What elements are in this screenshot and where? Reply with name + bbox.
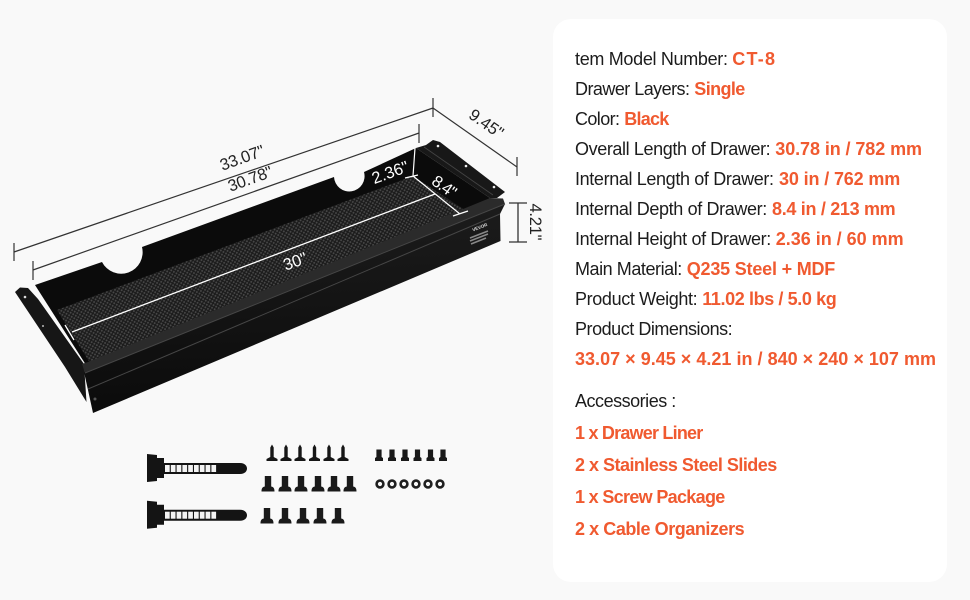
- spec: product dimensions: [575, 319, 936, 369]
- spec: drawer layers: [575, 79, 745, 99]
- spec: internal length: Internal Length of Drawer:: [575, 169, 774, 189]
- spec: product weight: Product Weight:: [575, 289, 698, 309]
- pointed screws row: [266, 444, 348, 461]
- spec: internal depth: [575, 199, 896, 219]
- dimension 30 in internal length: 30": [281, 249, 310, 275]
- drawer product illustration: [15, 140, 505, 413]
- dimension 33.07 in overall length: [14, 98, 433, 261]
- accessory: slides: 2 x Stainless Steel Slides: [575, 455, 777, 475]
- front rim: [82, 198, 505, 373]
- cable organizer bottom: [147, 501, 247, 529]
- dimension 2.36 in internal height: [369, 148, 418, 188]
- spec: color: Color:: [575, 109, 620, 129]
- spec: product weight: [575, 289, 837, 309]
- panel background: [553, 19, 947, 582]
- dimension 8.4 in internal depth: 8.4": [428, 172, 460, 202]
- mesh drawer liner: [57, 176, 468, 363]
- spec: product dimensions: 33.07 × 9.45 × 4.21 in / 840 × 240 × 107 mm: [575, 349, 936, 369]
- spec: internal depth: 8.4 in / 213 mm: [772, 199, 896, 219]
- panel: specifications: [553, 19, 947, 582]
- right mounting flange: [416, 140, 505, 198]
- spec: internal height: Internal Height of Drawer:: [575, 229, 771, 249]
- spec: main material: [575, 259, 835, 279]
- dimension 4.21 in height: [509, 203, 544, 242]
- front body: [84, 204, 505, 413]
- spec: overall length: Overall Length of Drawer:: [575, 139, 771, 159]
- spec: internal height: [575, 229, 904, 249]
- accessories heading: Accessories :: [575, 391, 676, 411]
- spec: internal depth: Internal Depth of Drawer:: [575, 199, 767, 219]
- spec: overall length: 30.78 in / 782 mm: [775, 139, 922, 159]
- nuts row: [377, 481, 443, 487]
- cable organizers: [147, 454, 247, 529]
- spec: color: Black: [624, 109, 670, 129]
- screw package: [260, 444, 447, 524]
- product label: [470, 222, 489, 244]
- spec: product weight: 11.02 lbs / 5.0 kg: [702, 289, 837, 309]
- dimension 30.78 in drawer length: [33, 124, 419, 280]
- left mounting flange: [15, 288, 86, 402]
- cable organizer top: [147, 454, 247, 482]
- spec: item model number: tem Model Number:: [575, 49, 728, 69]
- rim and groove lines: [85, 204, 505, 389]
- dimension 33.07 in overall length: 33.07": [218, 142, 267, 175]
- spec: main material: Main Material:: [575, 259, 682, 279]
- short bolts row: [375, 450, 447, 461]
- spec: internal length: 30 in / 762 mm: [779, 169, 900, 189]
- dimension 8.4 in internal depth: [413, 172, 468, 216]
- spec: internal height: 2.36 in / 60 mm: [776, 229, 904, 249]
- spec: overall length: [575, 139, 922, 159]
- dimension 2.36 in internal height: 2.36": [369, 158, 411, 188]
- machine screws row two: [262, 476, 356, 492]
- spec: internal length: [575, 169, 900, 189]
- dimension 4.21 in height: 4.21": [526, 204, 544, 241]
- spec: product dimensions: Product Dimensions:: [575, 319, 733, 339]
- dimension 9.45 in depth: [433, 106, 517, 176]
- accessory: cable organizers: 2 x Cable Organizers: [575, 519, 745, 539]
- dimension 9.45 in depth: 9.45": [465, 106, 507, 142]
- product label: VEVOR: [472, 222, 489, 232]
- spec: drawer layers: Drawer Layers:: [575, 79, 690, 99]
- dimension 30 in internal length: [65, 194, 435, 340]
- dimension 30.78 in drawer length: 30.78": [226, 163, 275, 196]
- spec: item model number: CT-8: [732, 49, 775, 69]
- spec: drawer layers: Single: [694, 79, 745, 99]
- machine screws row three: [260, 508, 344, 524]
- back wall with cable cut-outs: [35, 148, 490, 365]
- spec: main material: Q235 Steel + MDF: [687, 259, 835, 279]
- screw detail on body: [94, 398, 96, 400]
- spec: color: [575, 109, 670, 129]
- accessory: screw package: 1 x Screw Package: [575, 487, 725, 507]
- accessory: drawer liner: 1 x Drawer Liner: [575, 423, 703, 443]
